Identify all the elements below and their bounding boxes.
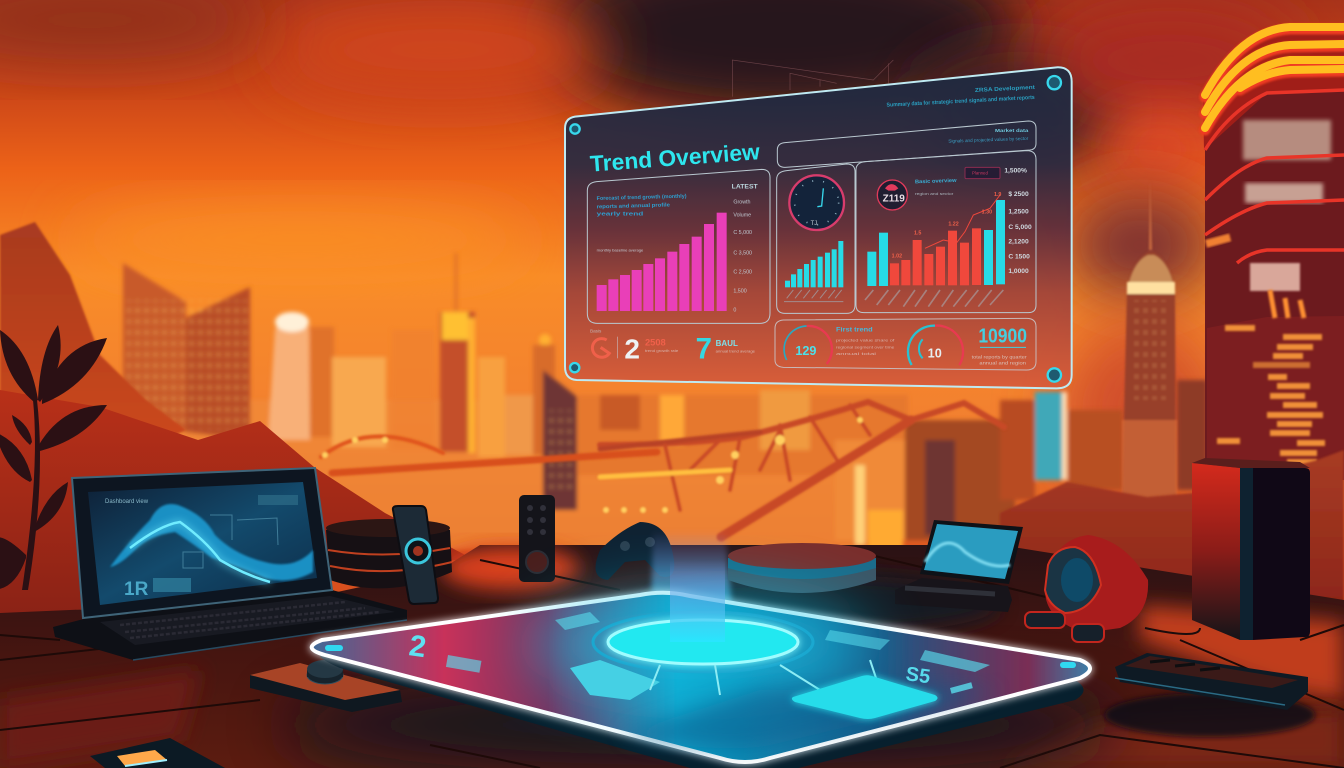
laptop left — [53, 468, 407, 660]
bottom right gauge panel: annual and region — [979, 361, 1027, 366]
bottom left statistics: 2508 — [645, 337, 666, 347]
holographic dashboard panel: Signals and projected values by sector — [948, 136, 1029, 144]
clock gauge: TJ — [811, 221, 817, 227]
bottom left statistics: annual trend average — [716, 349, 756, 354]
right combo chart panel: C 1500 — [1008, 253, 1030, 260]
panel frame — [565, 67, 1072, 388]
top caption: Summary data for strategic trend signals and market reports — [886, 95, 1035, 109]
badge — [877, 180, 907, 210]
cable — [1145, 628, 1200, 634]
gauge 10 — [908, 326, 963, 365]
tablet surface — [312, 593, 1090, 762]
right combo chart panel: 1,0000 — [1008, 268, 1029, 275]
bottom right gauge panel: total reports by quarter — [972, 355, 1027, 360]
right combo chart panel: Basic overview — [915, 178, 958, 185]
neon skyscraper right — [1203, 25, 1344, 480]
left chart panel: 0 — [733, 308, 736, 314]
bottom left statistics: BAUL — [716, 339, 738, 348]
bottom right gauge panel: First trend — [836, 327, 873, 334]
heading: Trend Overview — [589, 138, 761, 177]
tablet glow — [530, 590, 870, 700]
small puck device — [250, 660, 402, 712]
phone remote — [393, 506, 438, 604]
left chart panel: monthly baseline average — [597, 247, 644, 252]
hologram ring — [593, 612, 813, 672]
left chart panel — [587, 169, 770, 323]
tablet widgets: S5 — [904, 663, 932, 688]
right combo chart panel: C 5,000 — [1008, 224, 1032, 231]
left chart panel: LATEST — [732, 183, 758, 190]
gauge 10: 10 — [928, 346, 942, 360]
wireframe above panel — [732, 60, 893, 97]
holographic dashboard panel: Market data — [995, 128, 1029, 134]
black tower device — [1192, 458, 1310, 640]
top caption: ZRSA Development — [975, 85, 1035, 94]
top caption — [886, 85, 1035, 109]
beam core — [670, 560, 725, 642]
left chart panel: reports and annual profile — [597, 202, 670, 210]
badge: Z119 — [883, 194, 905, 205]
bottom left statistics: 2 — [624, 334, 640, 365]
laptop lid — [72, 468, 332, 618]
small laptop — [895, 520, 1023, 612]
bar chart: cyan and red — [867, 200, 1005, 286]
laptop base and keyboard — [53, 590, 407, 660]
keyboard right — [1105, 653, 1315, 737]
bar chart: pink — [597, 213, 727, 311]
black speaker — [519, 495, 555, 582]
left chart panel: yearly trend — [597, 212, 643, 218]
bottom card with light — [90, 738, 225, 768]
city skyline — [100, 253, 1207, 550]
bridge — [321, 402, 1004, 537]
glowing tablet — [312, 560, 1090, 768]
bottom right gauge panel: projected value share of — [836, 338, 896, 343]
left chart panel: Volume — [733, 213, 751, 219]
right combo chart panel: 1,2500 — [1008, 208, 1029, 215]
bottom left statistics: 7 — [696, 333, 712, 366]
right combo chart panel: Planned — [972, 171, 988, 176]
left chart panel: Forecast of trend growth (monthly) — [597, 194, 687, 202]
tablet cyan button — [792, 675, 938, 719]
game controller — [596, 522, 674, 580]
left chart panel: C 2,500 — [733, 269, 752, 275]
right combo chart panel: region and sector — [915, 191, 954, 196]
corner bolts — [570, 76, 1061, 382]
tablet widgets: 2 — [407, 629, 428, 664]
right combo chart panel: $ 2500 — [1008, 191, 1029, 198]
left chart panel: Growth — [733, 199, 751, 205]
hologram beam — [650, 530, 735, 640]
right combo chart panel: 1.02 — [892, 253, 902, 259]
bottom left statistics — [590, 329, 756, 366]
left chart panel: C 5,000 — [733, 230, 752, 236]
right combo chart panel: 2,1200 — [1008, 239, 1029, 246]
plant silhouette — [0, 325, 107, 590]
laptop screen — [88, 482, 317, 605]
desk surface — [0, 545, 1344, 768]
right combo chart panel: 1,500% — [1004, 168, 1027, 175]
trend line — [925, 195, 1000, 248]
round router — [728, 543, 876, 593]
red speaker — [1025, 535, 1148, 642]
right combo chart panel: 1.5 — [914, 231, 921, 237]
middle gauge panel — [777, 164, 855, 313]
gauge 129: 129 — [795, 344, 816, 358]
holographic dashboard panel — [565, 60, 1072, 388]
clock gauge — [789, 175, 844, 230]
bottom right gauge panel — [775, 318, 1036, 370]
gauge 129 — [784, 326, 832, 364]
back mountain left — [0, 222, 186, 470]
header strip box — [777, 121, 1036, 167]
laptop screen: 1R — [124, 579, 149, 600]
bottom right gauge panel: annual total — [836, 351, 876, 356]
right combo chart panel: 1.9 — [994, 192, 1001, 198]
bar chart: cyan small — [785, 241, 843, 287]
front mountains — [0, 390, 1344, 620]
right combo chart panel — [856, 151, 1036, 313]
left chart panel: 1,500 — [733, 288, 747, 294]
right combo chart panel: 1.30 — [982, 209, 992, 215]
spire tower right — [1122, 180, 1177, 500]
bottom right gauge panel: 10900 — [978, 325, 1027, 348]
left chart panel: C 3,500 — [733, 250, 752, 256]
stacked discs behind phone — [326, 519, 452, 588]
right combo chart panel: 1.22 — [948, 222, 959, 228]
laptop screen: Dashboard view — [105, 499, 149, 505]
bottom right gauge panel: regional segment over time — [836, 344, 895, 349]
bottom left statistics: trend growth rate — [645, 348, 679, 353]
bottom left statistics: Basis — [590, 329, 602, 334]
tablet body — [320, 600, 1084, 768]
tablet widgets — [325, 612, 1076, 700]
